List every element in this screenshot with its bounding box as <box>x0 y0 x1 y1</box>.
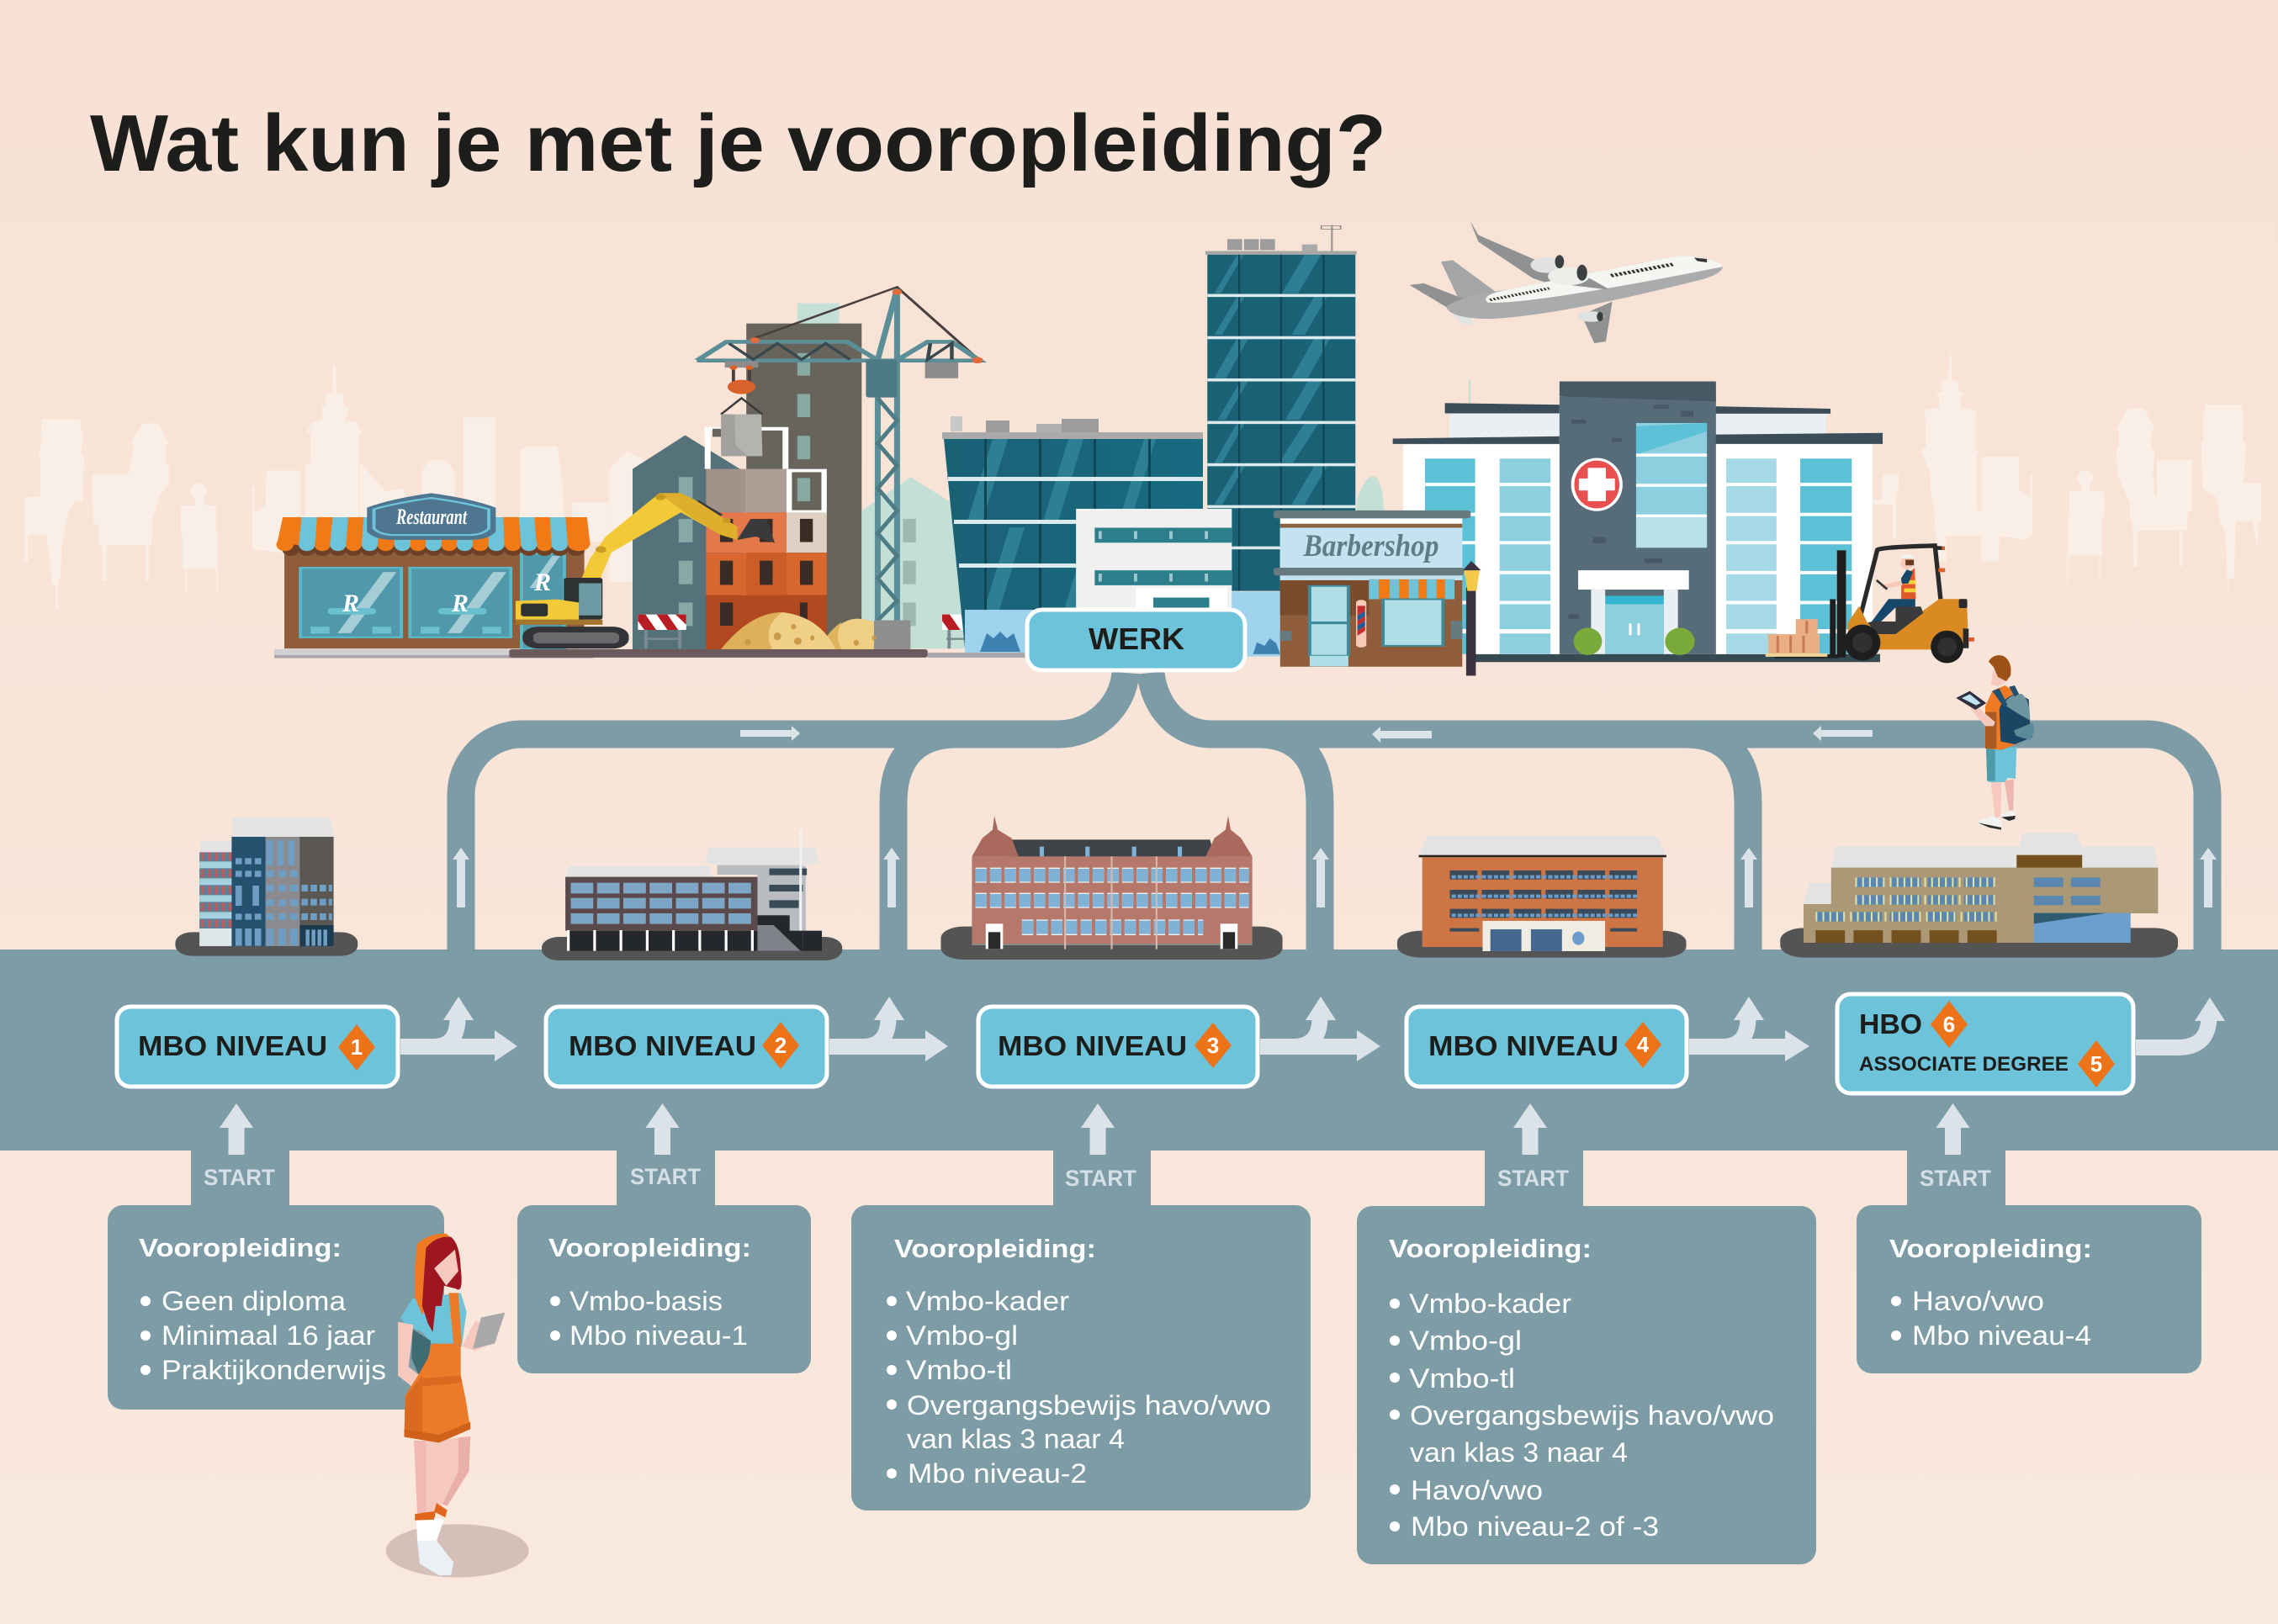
light green building <box>861 477 967 648</box>
box: hbo and associate degree: 5 <box>2090 1051 2102 1076</box>
panel: vooropleiding mbo 1: Geen diploma <box>162 1286 346 1316</box>
box: mbo niveau 1: MBO NIVEAU <box>138 1030 327 1061</box>
tower crane <box>697 287 983 621</box>
box: werk: WERK <box>1089 622 1184 656</box>
rail: branches to work <box>893 734 1748 959</box>
box: werk <box>1027 610 1245 670</box>
box: hbo and associate degree: 6 <box>1943 1012 1955 1037</box>
start arrows <box>220 1103 1970 1155</box>
left wing <box>1393 403 1560 654</box>
box: hbo and associate degree: ASSOCIATE DEGREE <box>1859 1053 2069 1076</box>
panel: vooropleiding mbo 2 <box>517 1205 811 1373</box>
title: Wat kun je met je vooropleiding? <box>90 98 1386 188</box>
panel: vooropleiding mbo 1 <box>108 1205 444 1410</box>
start labels: START <box>1065 1166 1136 1191</box>
panel: vooropleiding hbo: Havo/vwo <box>1912 1286 2044 1316</box>
construction site: R <box>342 590 359 617</box>
panel: vooropleiding mbo 2: Vmbo-basis <box>570 1286 723 1316</box>
school building 5 <box>1780 833 2178 958</box>
box: hbo and associate degree: HBO <box>1859 1008 1922 1039</box>
box: mbo niveau 2: MBO NIVEAU <box>569 1030 756 1061</box>
arrow level 1 <box>400 997 517 1061</box>
slate house <box>633 435 743 649</box>
panel: vooropleiding mbo 3: Vmbo-gl <box>906 1320 1018 1351</box>
start tabs <box>191 1144 2005 1211</box>
forklift driver <box>1872 554 1915 622</box>
airplane <box>1410 221 1723 343</box>
barricades <box>638 615 977 648</box>
box: mbo niveau 3: 3 <box>1207 1033 1219 1058</box>
panel: vooropleiding mbo 4: Vmbo-tl <box>1409 1363 1515 1394</box>
road band <box>0 950 2278 1151</box>
panel: vooropleiding mbo 4: Havo/vwo <box>1411 1475 1543 1505</box>
panel: vooropleiding mbo 1: Vooropleiding: <box>139 1233 342 1262</box>
start labels: START <box>1920 1166 1991 1191</box>
central tower <box>1560 382 1716 654</box>
rail: right arch to work <box>1151 673 2207 959</box>
start labels: START <box>630 1164 701 1189</box>
excavator <box>516 493 775 648</box>
glass office building <box>928 416 1203 658</box>
panel: vooropleiding mbo 3: Mbo niveau-2 <box>908 1458 1087 1489</box>
red cross emblem <box>1571 458 1623 511</box>
panel: vooropleiding mbo 4: Overgangsbewijs havo/vwo <box>1410 1400 1774 1431</box>
panel: vooropleiding mbo 4: Vmbo-gl <box>1409 1325 1522 1356</box>
school building 3 <box>940 816 1283 960</box>
box: mbo niveau 2 <box>546 1007 827 1087</box>
girl with tablet <box>386 1234 529 1578</box>
barbershop <box>1274 510 1470 667</box>
panel: vooropleiding hbo: Vooropleiding: <box>1889 1234 2092 1263</box>
box: mbo niveau 4: MBO NIVEAU <box>1428 1030 1618 1061</box>
forklift <box>1766 546 1974 663</box>
school building 2 <box>542 830 842 960</box>
restaurant <box>274 493 593 659</box>
panel: vooropleiding mbo 2: Vooropleiding: <box>548 1233 751 1262</box>
box: mbo niveau 2: 2 <box>775 1033 787 1058</box>
barbershop: Barbershop <box>1303 529 1438 563</box>
box: mbo niveau 4: 4 <box>1637 1032 1650 1057</box>
student with tablet and backpack <box>1956 655 2034 830</box>
start labels <box>204 1164 1991 1191</box>
arrow level 5 <box>2136 997 2225 1048</box>
white office building <box>1076 509 1280 657</box>
background skyline left <box>24 366 644 608</box>
school building 1 <box>175 818 358 956</box>
panel: vooropleiding mbo 3: Vooropleiding: <box>894 1234 1096 1263</box>
sand piles <box>721 612 910 649</box>
panel: vooropleiding mbo 3 <box>851 1205 1311 1510</box>
box: hbo and associate degree <box>1837 994 2133 1093</box>
panel: vooropleiding mbo 3: Vmbo-kader <box>906 1286 1069 1316</box>
panel: vooropleiding mbo 3: Overgangsbewijs havo/vwo <box>907 1390 1271 1420</box>
arrow level 2 <box>829 997 948 1061</box>
street lamp <box>1463 561 1481 675</box>
flow arrows between levels <box>400 997 2225 1061</box>
right wing <box>1707 406 1883 654</box>
glass tower <box>1205 225 1384 591</box>
rail: left arch to work <box>461 673 1126 959</box>
panel: vooropleiding mbo 4: Vooropleiding: <box>1389 1234 1592 1263</box>
bushes <box>1574 628 1695 655</box>
hospital <box>1393 380 1883 662</box>
restaurant sign text: Restaurant <box>395 505 468 529</box>
construction road <box>509 649 928 658</box>
box: mbo niveau 1 <box>117 1007 398 1087</box>
panel: vooropleiding mbo 4 <box>1357 1206 1816 1564</box>
panel: vooropleiding mbo 1: Praktijkonderwijs <box>162 1355 386 1385</box>
panel: vooropleiding mbo 1: Minimaal 16 jaar <box>162 1320 375 1351</box>
box: mbo niveau 3: MBO NIVEAU <box>998 1030 1187 1061</box>
box: mbo niveau 3 <box>978 1007 1258 1087</box>
arrow level 3 <box>1260 997 1380 1061</box>
brick building under construction <box>706 429 827 649</box>
panel: vooropleiding mbo 4: Mbo niveau-2 of -3 <box>1411 1511 1659 1542</box>
panel: vooropleiding hbo: Mbo niveau-4 <box>1912 1320 2091 1351</box>
crates <box>1766 619 1827 657</box>
panel: vooropleiding mbo 3: Vmbo-tl <box>906 1355 1012 1385</box>
construction site: R <box>451 590 469 617</box>
panel: vooropleiding hbo <box>1857 1205 2201 1373</box>
school building 4 <box>1397 836 1686 958</box>
start labels: START <box>1497 1166 1569 1191</box>
background skyline right <box>1872 352 2261 595</box>
panel: vooropleiding mbo 4: Vmbo-kader <box>1409 1288 1571 1319</box>
panel: vooropleiding mbo 2: Mbo niveau-1 <box>570 1320 748 1351</box>
arrow level 4 <box>1689 997 1809 1061</box>
start labels: START <box>204 1165 275 1190</box>
panel: vooropleiding mbo 4: van klas 3 naar 4 <box>1410 1437 1628 1468</box>
panel: vooropleiding mbo 3: van klas 3 naar 4 <box>907 1424 1125 1454</box>
hospital entrance <box>1578 570 1689 654</box>
rail arrows <box>453 726 2217 907</box>
box: mbo niveau 1: 1 <box>351 1034 363 1060</box>
tall grey building <box>746 304 861 649</box>
construction site: R <box>533 569 551 596</box>
box: mbo niveau 4 <box>1407 1007 1687 1087</box>
construction site <box>274 287 983 659</box>
